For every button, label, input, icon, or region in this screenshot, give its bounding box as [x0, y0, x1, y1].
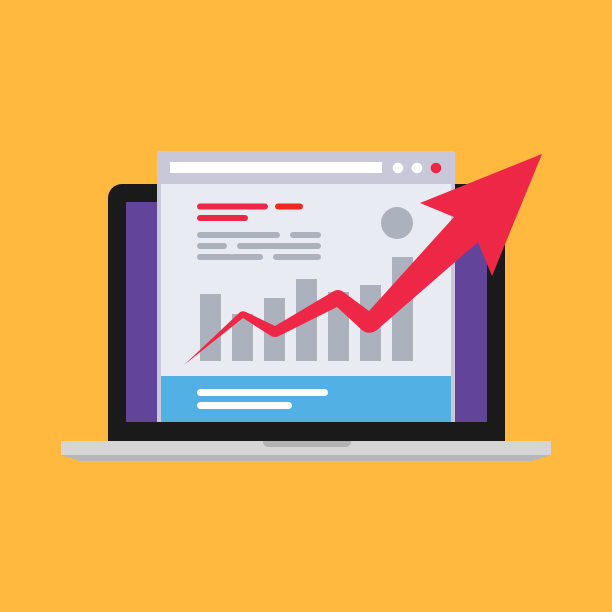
red headline lines [197, 204, 303, 221]
blue footer [161, 376, 451, 422]
laptop screen wallpaper [126, 202, 487, 422]
laptop screen bezel [108, 184, 505, 441]
bar chart [200, 257, 413, 361]
window buttons [393, 163, 441, 173]
rising red arrow [184, 154, 542, 365]
browser frame [157, 151, 455, 422]
laptop base [61, 441, 551, 461]
grey text lines [197, 232, 321, 260]
laptop [61, 184, 551, 461]
browser window [157, 151, 455, 422]
avatar circle [381, 207, 413, 239]
page content background [161, 184, 451, 376]
trackpad notch [263, 441, 351, 447]
footer text lines [197, 389, 328, 409]
address bar [170, 162, 382, 173]
